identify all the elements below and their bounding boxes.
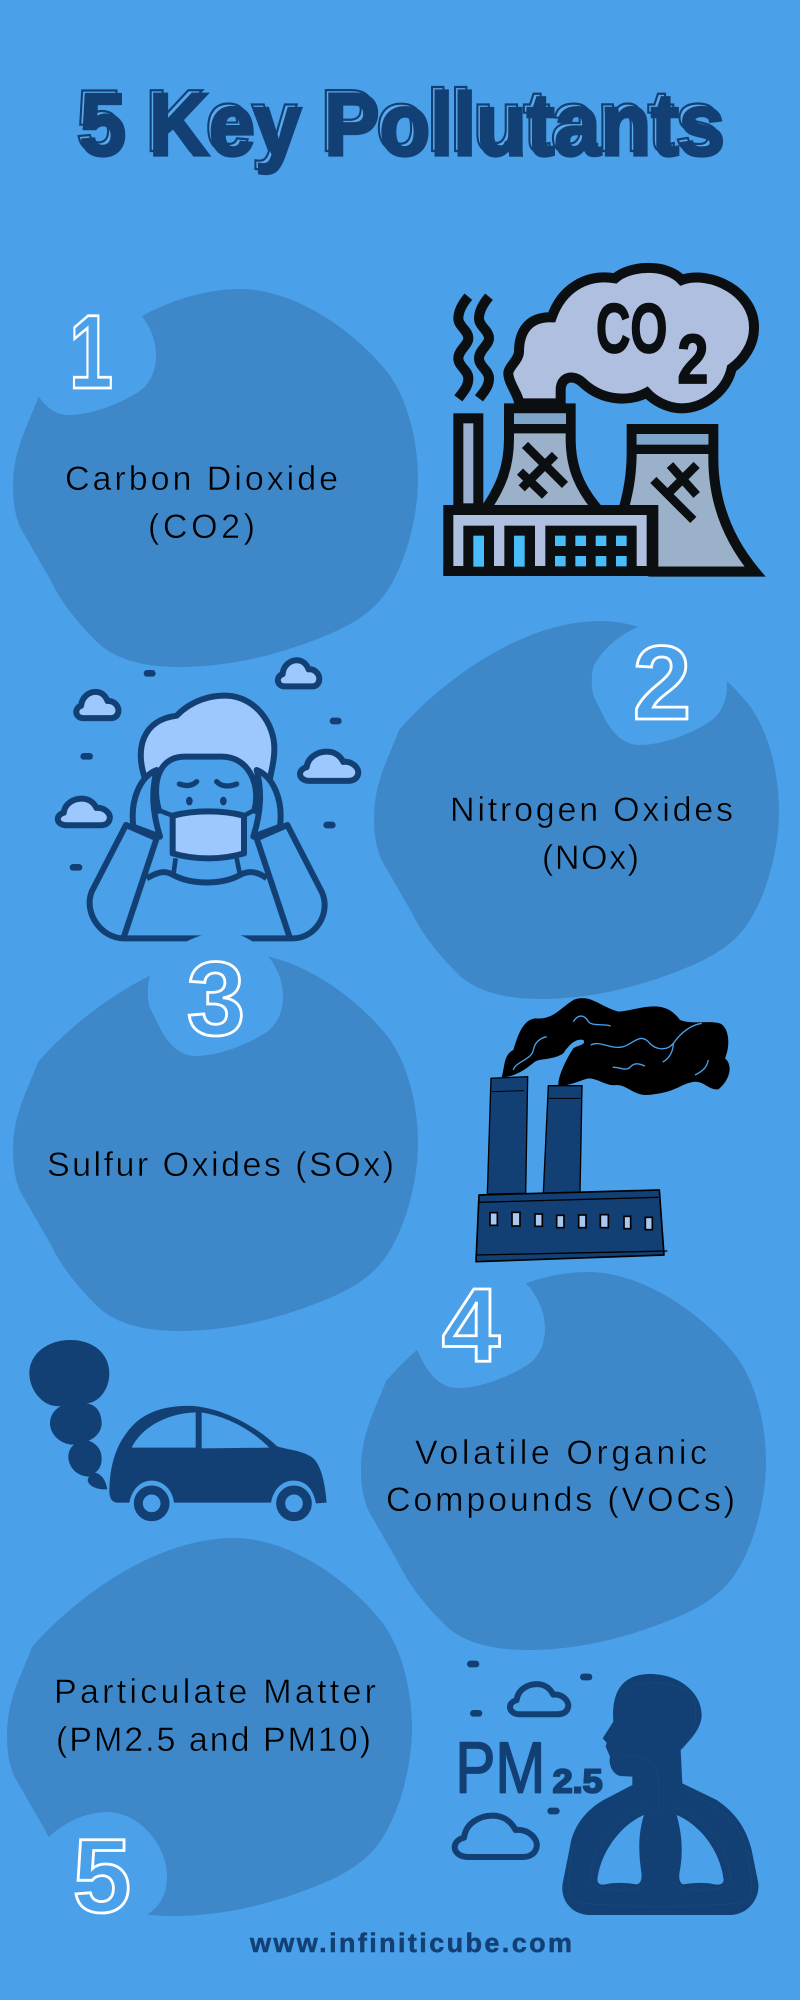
- number 3: 3: [187, 941, 245, 1058]
- label: Nitrogen Oxides (NOx): (NOx): [542, 839, 639, 877]
- label: Particulate Matter (PM2.5 and PM10): (PM2.5 and PM10): [56, 1721, 371, 1759]
- blob 4 with number notch: [361, 1264, 766, 1650]
- label: Volatile Organic Compounds (VOCs): [386, 1434, 735, 1519]
- label: Nitrogen Oxides (NOx): Nitrogen Oxides: [450, 791, 733, 829]
- label: Carbon Dioxide (CO2): Carbon Dioxide: [65, 460, 338, 498]
- label: Volatile Organic Compounds (VOCs): Compounds (VOCs): [386, 1481, 735, 1519]
- icon: factory with black smoke: [476, 998, 730, 1262]
- icon: power plant emitting CO2: 2: [677, 320, 708, 398]
- label: Nitrogen Oxides (NOx): [450, 791, 733, 877]
- panel: 2 Nitrogen Oxides: [374, 621, 779, 999]
- icon: power plant emitting CO2: [443, 268, 762, 576]
- label: Volatile Organic Compounds (VOCs): Volatile Organic: [415, 1434, 707, 1472]
- panel: 1 Carbon Dioxide: [13, 289, 418, 667]
- panel: 3 Sulfur Oxides: [13, 932, 418, 1331]
- icon: PM2.5 clouds and human lungs: PM: [455, 1728, 545, 1809]
- number 4: 4: [442, 1267, 500, 1384]
- panel: 4 Volatile Organic Compounds: [361, 1264, 766, 1650]
- label: Particulate Matter (PM2.5 and PM10): [54, 1673, 376, 1759]
- blob 1 with number notch: [13, 289, 418, 667]
- icon: person wearing a mask among smog clouds: [58, 660, 358, 938]
- label: Sulfur Oxides (SOx): Sulfur Oxides (SOx): [47, 1146, 394, 1184]
- panel: 5 Particulate Matter: [7, 1538, 412, 1936]
- number 1: 1: [69, 294, 113, 411]
- title: 5 Key Pollutants: [76, 71, 721, 170]
- number 2: 2: [633, 625, 691, 742]
- icon: PM2.5 clouds and human lungs: 2.5: [553, 1764, 603, 1801]
- title: 5 Key Pollutants: [80, 75, 725, 174]
- number 5: 5: [73, 1818, 131, 1935]
- blob 5 with number notch: [7, 1538, 412, 1936]
- icon: car with exhaust smoke: [29, 1340, 327, 1517]
- label: Carbon Dioxide (CO2): [65, 460, 338, 546]
- blob 3 with number notch: [13, 932, 418, 1331]
- icon: PM2.5 clouds and human lungs: [455, 1664, 758, 1915]
- label: Particulate Matter (PM2.5 and PM10): Particulate Matter: [54, 1673, 376, 1711]
- footer website: www.infiniticube.com: [249, 1928, 572, 1958]
- icon: power plant emitting CO2: CO: [596, 289, 667, 367]
- label: Carbon Dioxide (CO2): (CO2): [148, 508, 255, 546]
- blob 2 with number notch: [374, 621, 779, 999]
